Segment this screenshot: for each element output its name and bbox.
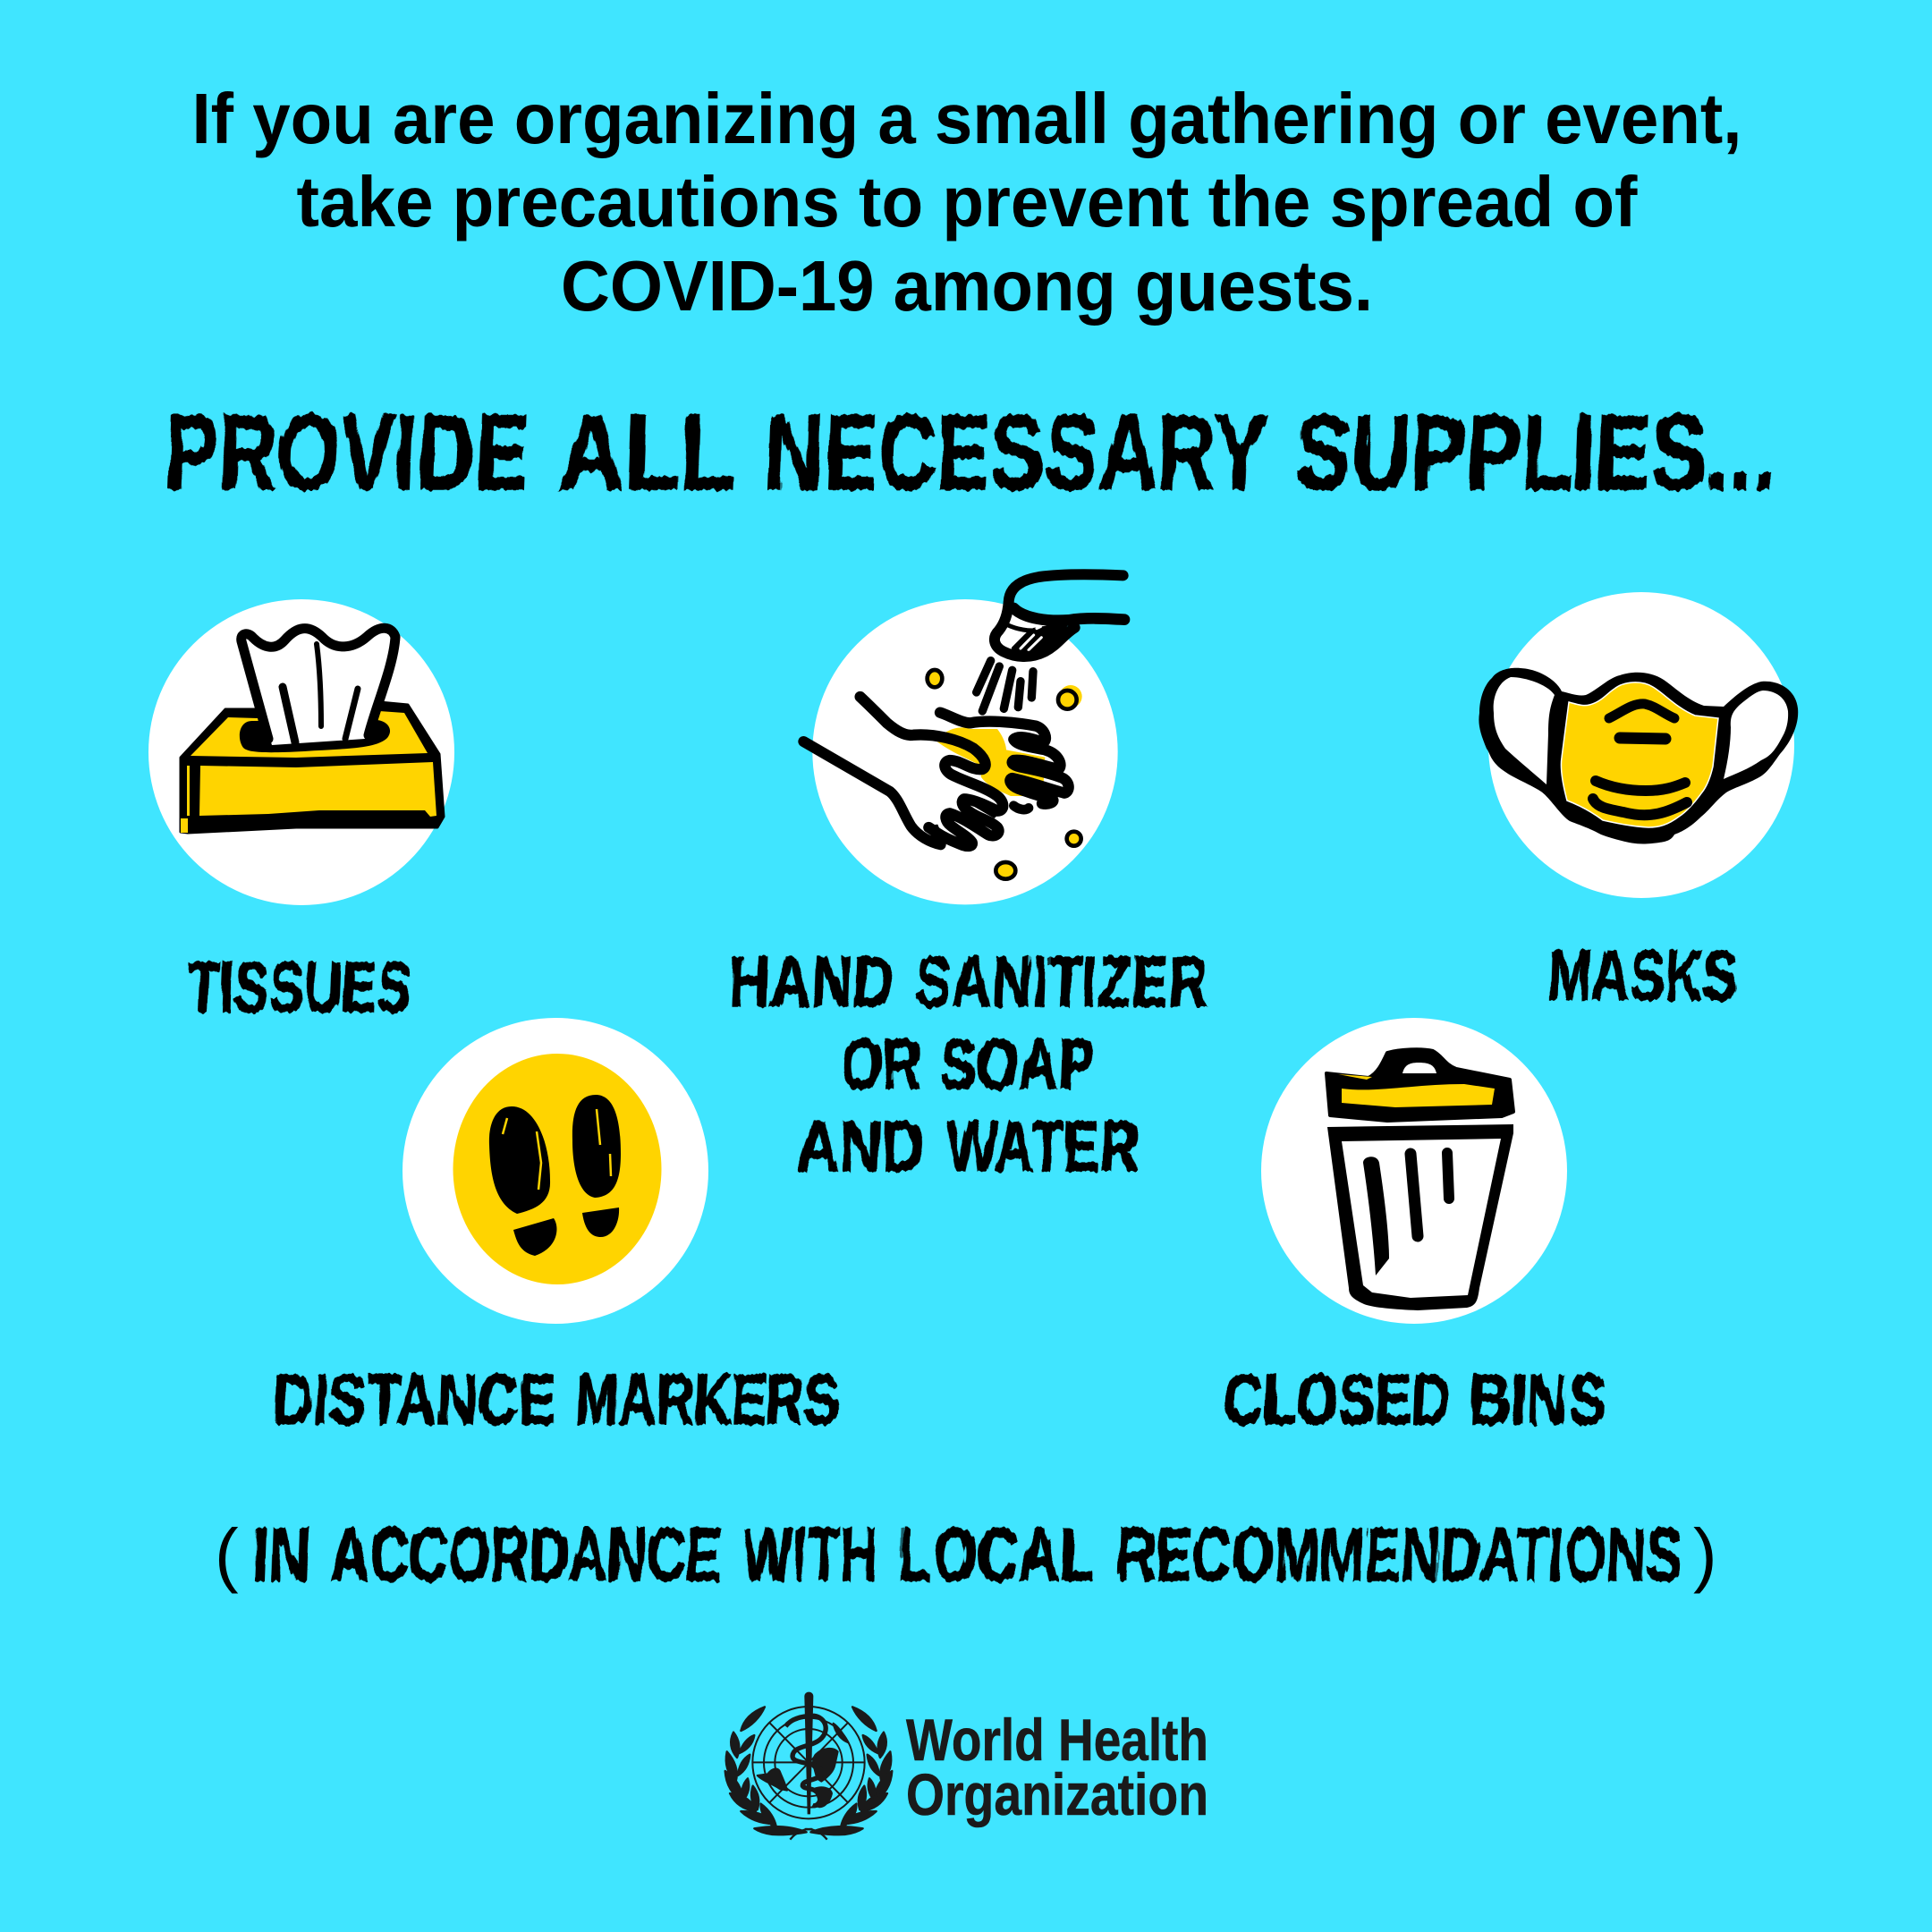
soap bubbles — [928, 670, 1082, 879]
panel: tissues icon — [148, 599, 454, 905]
heading: provide all necessary supplies — [163, 393, 1778, 513]
note: in accordance with local recommendations: ACCORDANCE — [329, 1513, 724, 1597]
label: hand sanitizer or soap and water: OR — [840, 1024, 923, 1104]
logo wordmark: Organization — [906, 1761, 1208, 1827]
logo wordmark — [906, 1707, 1208, 1827]
left ear loop — [1494, 677, 1555, 784]
logo: World Health Organization — [725, 1692, 1208, 1840]
panel: closed bins icon — [1261, 1018, 1567, 1324]
heading: provide all necessary supplies: PROVIDE — [163, 393, 531, 513]
bin body — [1327, 1124, 1513, 1310]
label: hand sanitizer or soap and water — [727, 942, 1210, 1186]
title: intro text: COVID-19 among guests. — [561, 246, 1373, 326]
tissue opening — [240, 720, 390, 752]
label: hand sanitizer or soap and water: SANITIZER — [913, 942, 1210, 1021]
note: in accordance with local recommendations: WITH — [741, 1513, 880, 1597]
right ear loop — [1724, 691, 1788, 779]
heading: provide all necessary supplies: NECESSARY — [763, 393, 1269, 513]
right hand — [940, 713, 1069, 804]
label: distance markers: MARKERS — [573, 1360, 841, 1439]
left sole — [489, 1106, 550, 1214]
label: hand sanitizer or soap and water: AND — [795, 1106, 927, 1186]
label: hand sanitizer or soap and water: WATER — [945, 1106, 1141, 1186]
tissue — [240, 628, 395, 745]
water drops — [977, 661, 1033, 711]
label: hand sanitizer or soap and water: HAND — [727, 942, 896, 1021]
panel: distance markers icon — [402, 1018, 708, 1324]
left heel — [513, 1218, 556, 1256]
bin lid — [1326, 1049, 1513, 1121]
label: closed bins: BINS — [1468, 1360, 1608, 1439]
heading: provide all necessary supplies: SUPPLIES... — [1293, 393, 1778, 513]
faucet — [995, 574, 1124, 657]
note: in accordance with local recommendations — [215, 1513, 1717, 1597]
right heel — [582, 1208, 619, 1237]
heading: provide all necessary supplies: ALL — [556, 393, 739, 513]
mask face — [1561, 682, 1718, 827]
label: hand sanitizer or soap and water: SOAP — [938, 1024, 1097, 1104]
mask silhouette — [1479, 668, 1798, 843]
panel: masks icon — [1479, 592, 1798, 898]
label: distance markers — [271, 1360, 841, 1439]
title: intro text: If you are organizing a small gathering or event, — [191, 79, 1742, 158]
note: in accordance with local recommendations: ( — [215, 1514, 239, 1594]
label: distance markers: DISTANCE — [271, 1360, 557, 1439]
note: in accordance with local recommendations: LOCAL — [896, 1513, 1097, 1597]
box silhouette — [181, 702, 444, 833]
note: in accordance with local recommendations: IN — [250, 1513, 313, 1597]
label: tissues: TISSUES — [186, 947, 413, 1027]
left hand — [860, 697, 1003, 846]
logo emblem — [725, 1692, 892, 1840]
panel: hand sanitizer icon — [803, 574, 1124, 904]
yellow soap patch — [936, 727, 1045, 796]
label: masks: MASKS — [1546, 936, 1740, 1015]
label: closed bins: CLOSED — [1222, 1360, 1453, 1439]
title: intro text: take precautions to prevent the spread of — [297, 162, 1638, 242]
title: intro text — [191, 79, 1742, 326]
note: in accordance with local recommendations: RECOMMENDATIONS — [1114, 1513, 1684, 1597]
note: in accordance with local recommendations: ) — [1693, 1514, 1717, 1594]
logo wordmark: World Health — [906, 1707, 1208, 1773]
right sole — [572, 1095, 621, 1198]
